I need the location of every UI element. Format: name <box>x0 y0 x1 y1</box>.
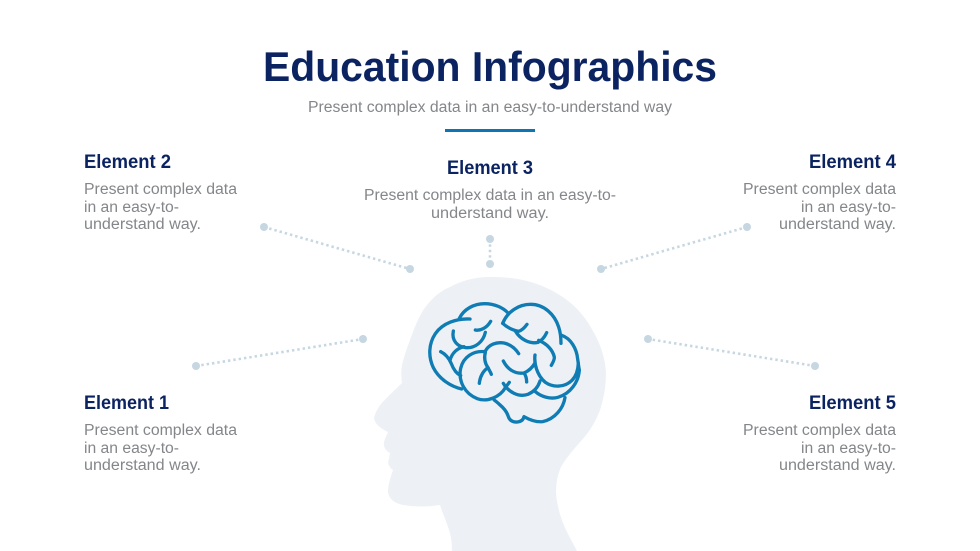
cerebellum <box>494 398 565 422</box>
text block: element 1: understand way. <box>84 457 201 474</box>
text block: element 2: Present complex data <box>84 181 237 198</box>
lower right outline <box>535 370 579 398</box>
top lobe outline <box>459 304 508 318</box>
text block: element 5: Present complex data <box>743 422 896 439</box>
text block: element 3 <box>364 158 616 222</box>
head silhouette <box>374 277 606 551</box>
text block: element 5: Element 5 <box>809 393 896 414</box>
upper right lobe outline <box>503 304 561 343</box>
inner right loop <box>535 355 578 386</box>
connector: element 4 <box>597 223 751 273</box>
connector: element 1 <box>192 335 367 370</box>
text block: element 3: understand way. <box>431 205 549 222</box>
text block: element 5: in an easy-to- <box>801 440 896 457</box>
text block: element 1 <box>84 393 237 474</box>
brain icon <box>430 304 579 422</box>
text block: element 4: in an easy-to- <box>801 199 896 216</box>
text block: element 2: understand way. <box>84 216 201 233</box>
text block: element 1: in an easy-to- <box>84 440 179 457</box>
text block: element 1: Element 1 <box>84 393 169 414</box>
subtitle: Present complex data in an easy-to-understand way <box>308 99 672 116</box>
right lobe outline <box>562 335 579 370</box>
text block: element 1: Present complex data <box>84 422 237 439</box>
connector: element 5 <box>644 335 819 370</box>
text block: element 2: Element 2 <box>84 152 171 173</box>
text block: element 3: Element 3 <box>447 158 533 179</box>
text block: element 4: Present complex data <box>743 181 896 198</box>
text block: element 5: understand way. <box>779 457 896 474</box>
text block: element 4: Element 4 <box>809 152 896 173</box>
title underline <box>445 129 535 132</box>
text block: element 4: understand way. <box>779 216 896 233</box>
text block: element 4 <box>743 152 896 233</box>
connector: element 2 <box>260 223 414 273</box>
title: Education Infographics <box>263 43 717 90</box>
text block: element 2: in an easy-to- <box>84 199 179 216</box>
text block: element 5 <box>743 393 896 474</box>
central lobe <box>460 351 509 400</box>
text block: element 3: Present complex data in an easy-to- <box>364 187 616 204</box>
text block: element 2 <box>84 152 237 233</box>
left lobe outline <box>430 319 470 389</box>
connector: element 3 <box>486 235 494 268</box>
inner folds <box>453 331 485 348</box>
